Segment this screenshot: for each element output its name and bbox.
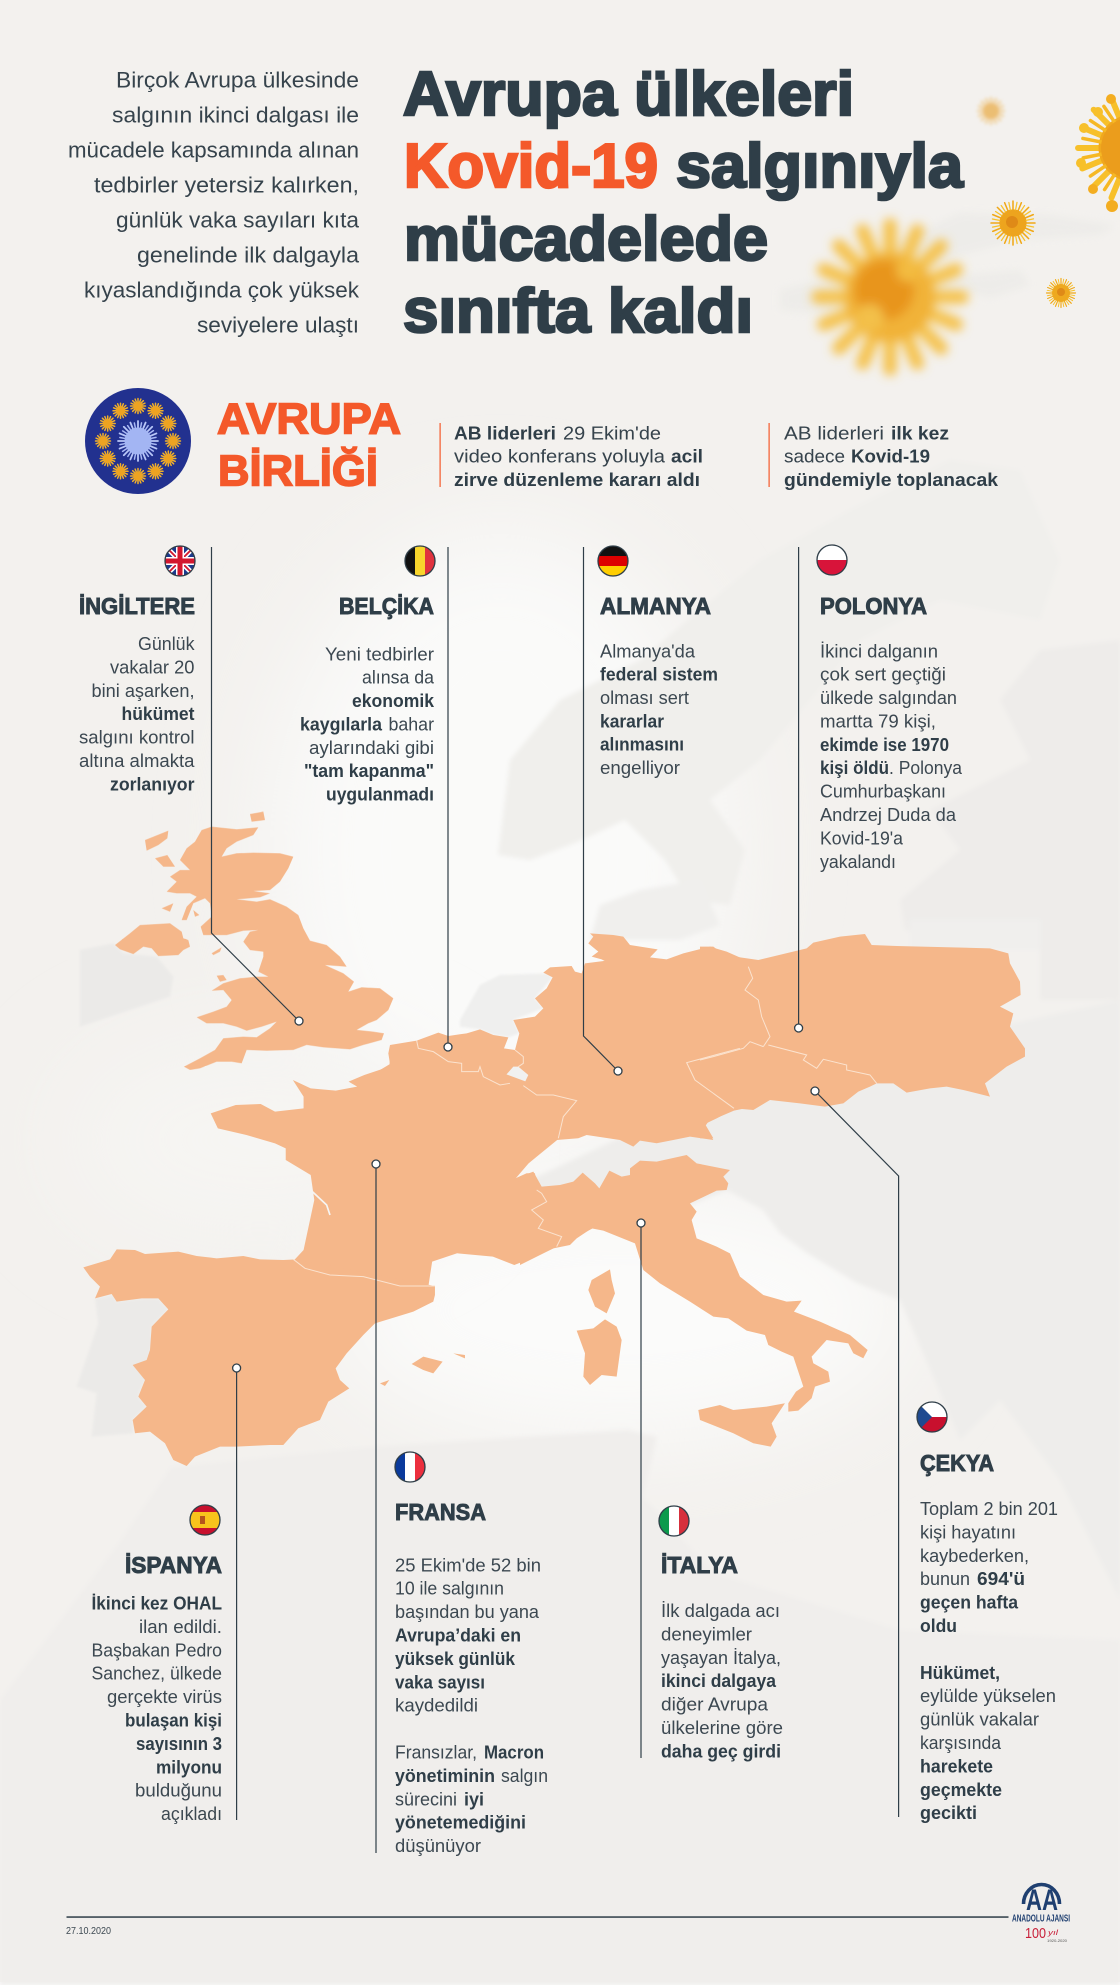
title: Avrupa ülkeleri: [403, 60, 854, 129]
intro paragraph: seviyelere ulaştı: [197, 312, 359, 338]
icon: Spain flag: [190, 1505, 220, 1535]
icon: Italy flag: [659, 1506, 689, 1536]
intro paragraph: mücadele kapsamında alınan: [68, 138, 359, 162]
icon: France flag: [395, 1452, 425, 1482]
panel: İspanya: sayısının 3: [136, 1734, 222, 1754]
icon: faded small virus: [978, 98, 1004, 124]
logo: Anadolu Ajansı: 100: [1025, 1925, 1046, 1942]
icon: Czech flag: [917, 1402, 947, 1432]
title: salgınıyla: [676, 132, 964, 201]
panel: Almanya: federal sistem: [600, 665, 718, 685]
panel: Çekya: kişi hayatını: [920, 1522, 1016, 1542]
panel: Fransa: yönetemediğini: [395, 1813, 526, 1833]
panel: İspanya: bulaşan kişi: [125, 1710, 222, 1730]
panel: Fransa: düşünüyor: [395, 1836, 481, 1856]
Spain: [83, 1249, 465, 1466]
panel: Fransa: Macron: [484, 1742, 544, 1762]
panel: Almanya: Almanya'da: [600, 641, 696, 661]
panel: İngiltere: Günlük: [138, 634, 195, 654]
intro paragraph: tedbirler yetersiz kalırken,: [94, 172, 359, 198]
panel: Almanya: ALMANYA: [600, 593, 711, 619]
panel: Polonya: martta 79 kişi,: [820, 711, 936, 731]
panel: İspanya: bulduğunu: [135, 1781, 222, 1801]
panel: Polonya: POLONYA: [820, 593, 927, 619]
panel: İtalya: yaşayan İtalya,: [661, 1648, 781, 1668]
logo: Anadolu Ajansı: ANADOLU AJANSI: [1012, 1912, 1070, 1924]
panel: Çekya: kaybederken,: [920, 1546, 1029, 1566]
icon: Poland flag: [817, 545, 847, 575]
panel: Fransa: sürecini: [395, 1789, 457, 1809]
logo: Anadolu Ajansı: 1920-2020: [1047, 1938, 1068, 1943]
text block: first time leaders meet: sadece: [784, 446, 845, 467]
panel: Fransa: vaka sayısı: [395, 1672, 485, 1692]
panel: Polonya: Andrzej Duda da: [820, 805, 957, 825]
panel: Çekya: 694'ü: [977, 1569, 1025, 1589]
panel: Polonya: Kovid-19'a: [820, 828, 904, 848]
panel: Polonya: yakalandı: [820, 852, 896, 872]
France: [211, 1042, 593, 1285]
panel: İspanya: [92, 1364, 241, 1824]
panel: Belçika: alınsa da: [362, 668, 435, 688]
panel: Polonya: çok sert geçtiği: [820, 665, 946, 685]
logo: Anadolu Ajansı: yıl: [1047, 1930, 1059, 1937]
panel: Çekya: geçmekte: [920, 1780, 1002, 1800]
panel: Çekya: karşısında: [920, 1733, 1002, 1753]
icon: UK flag: [165, 546, 195, 576]
panel: İtalya: diğer Avrupa: [661, 1695, 769, 1715]
text block: emergency summit: AB liderleri: [454, 422, 556, 443]
panel: Polonya: ülkede salgından: [820, 688, 957, 708]
panel: İngiltere: [79, 546, 303, 1025]
text block: emergency summit: zirve düzenleme kararı aldı: [454, 469, 700, 490]
panel: Belçika: kaygılarla: [300, 714, 383, 734]
panel: Çekya: Toplam 2 bin 201: [920, 1499, 1058, 1519]
panel: Fransa: [372, 1160, 548, 1856]
panel: Fransa: yüksek günlük: [395, 1649, 516, 1669]
panel: Fransa: yönetiminin: [395, 1766, 495, 1786]
panel: Almanya: engelliyor: [600, 758, 680, 778]
panel: İtalya: daha geç girdi: [661, 1741, 781, 1761]
panel: Fransa: başından bu yana: [395, 1602, 540, 1622]
panel: Fransa: 10 ile salgının: [395, 1579, 504, 1599]
intro paragraph: Birçok Avrupa ülkesinde: [116, 68, 359, 92]
panel: Polonya: [795, 545, 963, 1032]
country borders: [293, 967, 877, 1286]
text block: first time leaders meet: ilk kez: [891, 422, 949, 443]
panel: İngiltere: salgını kontrol: [79, 728, 194, 748]
panel: İngiltere: İNGİLTERE: [79, 593, 195, 619]
panel: Polonya: ekimde ise 1970: [820, 735, 949, 755]
panel: Almanya: alınmasını: [600, 735, 684, 755]
France, Belgium and Germany: [380, 933, 753, 1200]
panel: Belçika: BELÇİKA: [339, 593, 434, 619]
panel: İtalya: İlk dalgada acı: [661, 1601, 780, 1621]
panel: İtalya: deneyimler: [661, 1624, 752, 1644]
heading: Avrupa Birliği: BİRLİĞİ: [218, 446, 378, 496]
logo: Anadolu Ajansı: [1012, 1884, 1070, 1943]
panel: İspanya: İkinci kez OHAL: [92, 1594, 222, 1614]
intro paragraph: günlük vaka sayıları kıta: [116, 208, 360, 232]
panel: Çekya: [811, 1087, 1058, 1823]
panel: İspanya: Sanchez, ülkede: [92, 1664, 222, 1684]
Luxembourg gap: [506, 1067, 528, 1086]
panel: Çekya: bunun: [920, 1569, 970, 1589]
Italy, Corsica, Sardinia and Sicily: [520, 1155, 868, 1447]
panel: Fransa: salgın: [501, 1766, 548, 1786]
footer rule and date: 27.10.2020: [66, 1926, 111, 1937]
panel: Belçika: uygulanmadı: [326, 785, 434, 805]
heading: Avrupa Birliği: AVRUPA: [217, 394, 401, 444]
panel: İtalya: ülkelerine göre: [661, 1718, 783, 1738]
panel: Fransa: Fransızlar,: [395, 1742, 477, 1762]
icon: cropped virus at right edge: [1073, 89, 1120, 212]
panel: Fransa: Avrupa’daki en: [395, 1626, 521, 1646]
text block: first time leaders meet: AB liderleri: [784, 422, 884, 443]
EU emblem: [85, 388, 191, 494]
panel: Çekya: harekete: [920, 1756, 993, 1776]
map: highlighted countries: [83, 812, 1025, 1466]
panel: Çekya: ÇEKYA: [920, 1450, 994, 1476]
text block: emergency summit: video konferans yoluyla: [454, 446, 666, 467]
panel: İtalya: ikinci dalgaya: [661, 1671, 777, 1691]
text block: emergency summit: acil: [671, 446, 703, 467]
panel: Çekya: eylülde yükselen: [920, 1686, 1056, 1706]
panel: İspanya: milyonu: [156, 1757, 222, 1777]
panel: İtalya: [637, 1219, 783, 1761]
panel: İtalya: İTALYA: [661, 1552, 738, 1578]
icon: large blurred virus: [818, 225, 962, 369]
title: mücadelede: [404, 205, 768, 274]
panel: Fransa: iyi: [464, 1789, 484, 1809]
heading: Avrupa Birliği: [217, 394, 401, 496]
panel: Polonya: Cumhurbaşkanı: [820, 782, 946, 802]
text block: emergency summit: 29 Ekim'de: [563, 422, 661, 443]
panel: Belçika: Yeni tedbirler: [325, 644, 434, 664]
panel: Almanya: olması sert: [600, 688, 689, 708]
icon: Belgium flag: [405, 546, 435, 576]
icon: Germany flag: [598, 546, 628, 576]
intro paragraph: [68, 68, 360, 338]
panel: İspanya: açıkladı: [161, 1804, 222, 1824]
panel: Polonya: İkinci dalganın: [820, 641, 938, 661]
panel: İngiltere: zorlanıyor: [110, 774, 194, 794]
panel: İngiltere: hükümet: [122, 704, 194, 724]
panel: Belçika: aylarındaki gibi: [309, 738, 434, 758]
panel: Çekya: geçen hafta: [920, 1593, 1019, 1613]
panel: Çekya: oldu: [920, 1616, 957, 1636]
panel: İngiltere: altına almakta: [79, 751, 196, 771]
icon: medium virus: [988, 198, 1038, 248]
icon: small virus: [1045, 277, 1077, 309]
intro paragraph: salgının ikinci dalgası ile: [112, 102, 359, 128]
text block: first time leaders meet: [768, 422, 999, 490]
panel: İngiltere: bini aşarken,: [92, 681, 194, 701]
panel: Fransa: 25 Ekim'de 52 bin: [395, 1555, 541, 1575]
panel: Fransa: FRANSA: [395, 1499, 486, 1525]
title: Kovid-19: [404, 132, 658, 201]
panel: Çekya: Hükümet,: [920, 1663, 1000, 1683]
panel: Çekya: gecikti: [920, 1803, 977, 1823]
text block: emergency summit: [440, 422, 703, 490]
title: [403, 60, 964, 346]
panel: İspanya: Başbakan Pedro: [92, 1640, 222, 1660]
panel: Almanya: [584, 546, 718, 1075]
panel: Fransa: kaydedildi: [395, 1696, 478, 1716]
Great Britain and Ireland: [115, 812, 393, 1070]
virus illustrations: [818, 89, 1120, 369]
panel: Çekya: günlük vakalar: [920, 1710, 1039, 1730]
Poland and Czechia: [700, 934, 1025, 1138]
intro paragraph: genelinde ilk dalgayla: [137, 242, 360, 268]
title: sınıfta kaldı: [403, 277, 753, 346]
panel: İspanya: İSPANYA: [125, 1552, 222, 1578]
panel: Polonya: kişi öldü: [820, 758, 889, 778]
logo: Anadolu Ajansı: AA: [1026, 1884, 1058, 1917]
panel: Almanya: kararlar: [600, 711, 664, 731]
panel: Belçika: [300, 546, 452, 1051]
panel: İngiltere: vakalar 20: [110, 657, 194, 677]
text block: first time leaders meet: gündemiyle toplanacak: [784, 469, 999, 490]
panel: İspanya: ilan edildi.: [139, 1617, 222, 1637]
panel: Belçika: "tam kapanma": [304, 761, 434, 781]
intro paragraph: kıyaslandığında çok yüksek: [84, 278, 360, 302]
icon: ring of twelve viruses: [96, 398, 180, 484]
panel: Polonya: . Polonya: [889, 758, 963, 778]
icon: central virus: [116, 419, 160, 463]
text block: first time leaders meet: Kovid-19: [851, 446, 930, 467]
panel: İspanya: gerçekte virüs: [107, 1687, 222, 1707]
panel: Belçika: ekonomik: [352, 691, 435, 711]
panel: Belçika: bahar: [388, 714, 434, 734]
